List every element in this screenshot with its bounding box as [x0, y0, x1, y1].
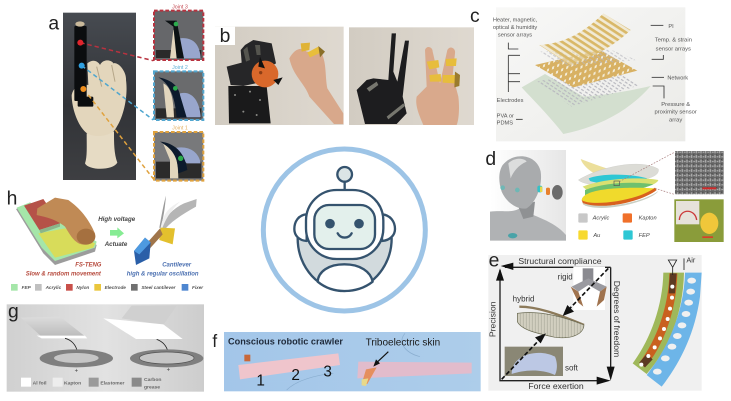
- legend: Acrylic: [45, 285, 62, 290]
- rigid gripper: [558, 267, 607, 310]
- inset: Joint 1: [154, 126, 203, 181]
- middle arrow and labels: High voltage: [98, 216, 136, 223]
- panel a: wooden hand with joint sensor: [48, 4, 203, 181]
- labels and arrows: right side: PI: [668, 24, 674, 30]
- legend: Carbon: [144, 377, 161, 383]
- background: [496, 7, 685, 141]
- panel h: FS-TENG actuating a cantilever: [7, 188, 204, 291]
- labels and arrows: right side: sensor arrays: [656, 46, 691, 52]
- left crawler with numbers: 2: [291, 367, 300, 384]
- photo: hand on dark background: [63, 13, 136, 180]
- axes chart frame: [487, 256, 622, 391]
- background: [7, 304, 204, 392]
- soft actuator photo: [505, 347, 579, 376]
- captions: FS-TENG: [75, 263, 102, 269]
- axes chart frame: Structural compliance: [518, 256, 602, 266]
- right crawler with triboelectric skin: Triboelectric skin: [366, 338, 440, 349]
- panel label b: [215, 26, 235, 47]
- inset: Joint 2: Joint 2: [172, 65, 188, 71]
- hybrid structure: [513, 295, 584, 338]
- soft actuator photo: soft: [565, 363, 579, 372]
- panel g: elastomer ring generator: [7, 302, 204, 392]
- panel f: conscious robotic crawler: [212, 331, 481, 391]
- legend: [21, 377, 161, 390]
- middle arrow and labels: [98, 216, 136, 248]
- inset: Joint 3: [154, 4, 203, 60]
- labels and arrows: right side: Network: [667, 75, 688, 81]
- left crawler with numbers: [228, 333, 420, 390]
- labels and arrows: right side: Pressure &: [661, 102, 690, 108]
- panel label c: c: [470, 6, 480, 27]
- legend: Nylon: [76, 285, 89, 290]
- labels and arrows: right side: [651, 24, 697, 123]
- panel label d: d: [485, 149, 496, 170]
- background: [488, 255, 702, 391]
- labels and arrows: left side: Electrodes: [497, 98, 524, 104]
- panel label f: f: [212, 331, 217, 351]
- legend: [578, 213, 657, 240]
- exploded sensor layers: [578, 152, 674, 208]
- labels and arrows: left side: Heater, magnetic,: [493, 17, 538, 23]
- left crawler with numbers: 1: [256, 373, 265, 390]
- axes chart frame: Force exertion: [528, 381, 584, 391]
- dashed diagonal arrows: [502, 268, 608, 379]
- device photo on green mat: [674, 199, 724, 242]
- captions: [26, 263, 199, 278]
- legend: grease: [144, 384, 160, 390]
- panel c: multilayer sensor skin diagram: [470, 6, 697, 141]
- legend: Au: [592, 233, 601, 239]
- panel e: soft robotics design space: [487, 250, 702, 391]
- hybrid structure: hybrid: [513, 295, 534, 304]
- panel label e: e: [489, 250, 499, 271]
- right device: [103, 306, 203, 374]
- left crawler with numbers: Conscious robotic crawler: [228, 336, 343, 346]
- sensor dots and dashed leader lines: [77, 40, 155, 181]
- SEM micrograph: [675, 151, 724, 194]
- panel b: robot hand mimicking human hand: [215, 26, 474, 125]
- panel label h: h: [7, 188, 17, 209]
- labels and arrows: left side: PDMS: [497, 121, 513, 127]
- left device: [21, 317, 113, 374]
- right device: +: [167, 368, 171, 374]
- legend: [11, 284, 204, 291]
- panel label a: a: [48, 13, 59, 34]
- robot icon: [294, 167, 395, 291]
- panel label b: b: [220, 26, 230, 47]
- cantilever illustration: [134, 196, 197, 265]
- captions: Cantilever: [162, 263, 192, 269]
- photo background: [224, 332, 481, 391]
- labels and arrows: right side: array: [669, 117, 682, 123]
- labels and arrows: right side: Temp. & strain: [655, 38, 692, 44]
- labels and arrows: right side: proximity sensor: [654, 110, 697, 116]
- legend: Kapton: [64, 380, 81, 386]
- labels and arrows: left side: [493, 17, 538, 127]
- captions: high & regular oscillation: [127, 272, 199, 278]
- inset: Joint 3: Joint 3: [172, 4, 188, 10]
- labels and arrows: left side: optical & humidity: [493, 25, 537, 31]
- inset: Joint 1: Joint 1: [172, 126, 188, 132]
- legend: Acrylic: [592, 216, 609, 222]
- photo: robot hand holding orange ball: [215, 27, 344, 125]
- panel d: ear-mounted triboelectric sensor: [485, 149, 724, 242]
- legend: FEP: [22, 285, 32, 290]
- middle arrow and labels: Actuate: [104, 241, 128, 248]
- curved soft finger cross-section: [633, 256, 702, 387]
- center: robot icon in blue ring: [263, 149, 425, 311]
- labels and arrows: left side: PVA or: [497, 113, 514, 119]
- blue ring: [263, 149, 425, 311]
- left device: +: [75, 368, 79, 374]
- legend: Steel cantilever: [141, 285, 177, 290]
- photo: robot hand and human hand showing V sign: [349, 27, 474, 125]
- left crawler with numbers: 3: [323, 363, 332, 380]
- axes chart frame: Precision: [487, 301, 497, 337]
- rigid gripper: rigid: [558, 272, 573, 281]
- robot head illustration: [490, 150, 566, 241]
- legend: Al foil: [33, 380, 47, 386]
- panel label g: g: [8, 302, 19, 323]
- axes chart frame: Degrees of freedom: [612, 281, 622, 357]
- triboelectric pad under wooden hand: [16, 198, 97, 265]
- inset: Joint 2: [154, 65, 203, 120]
- exploded layer stack: [522, 13, 651, 134]
- legend: FEP: [639, 233, 650, 239]
- curved soft finger cross-section: Air: [686, 256, 696, 265]
- labels and arrows: left side: sensor arrays: [498, 33, 532, 39]
- legend: Fixer: [192, 285, 204, 290]
- legend: Kapton: [639, 216, 657, 222]
- captions: Slow & random movement: [26, 272, 102, 278]
- right crawler with triboelectric skin: [357, 338, 472, 386]
- legend: Elastomer: [100, 380, 124, 386]
- legend: Electrode: [105, 285, 126, 290]
